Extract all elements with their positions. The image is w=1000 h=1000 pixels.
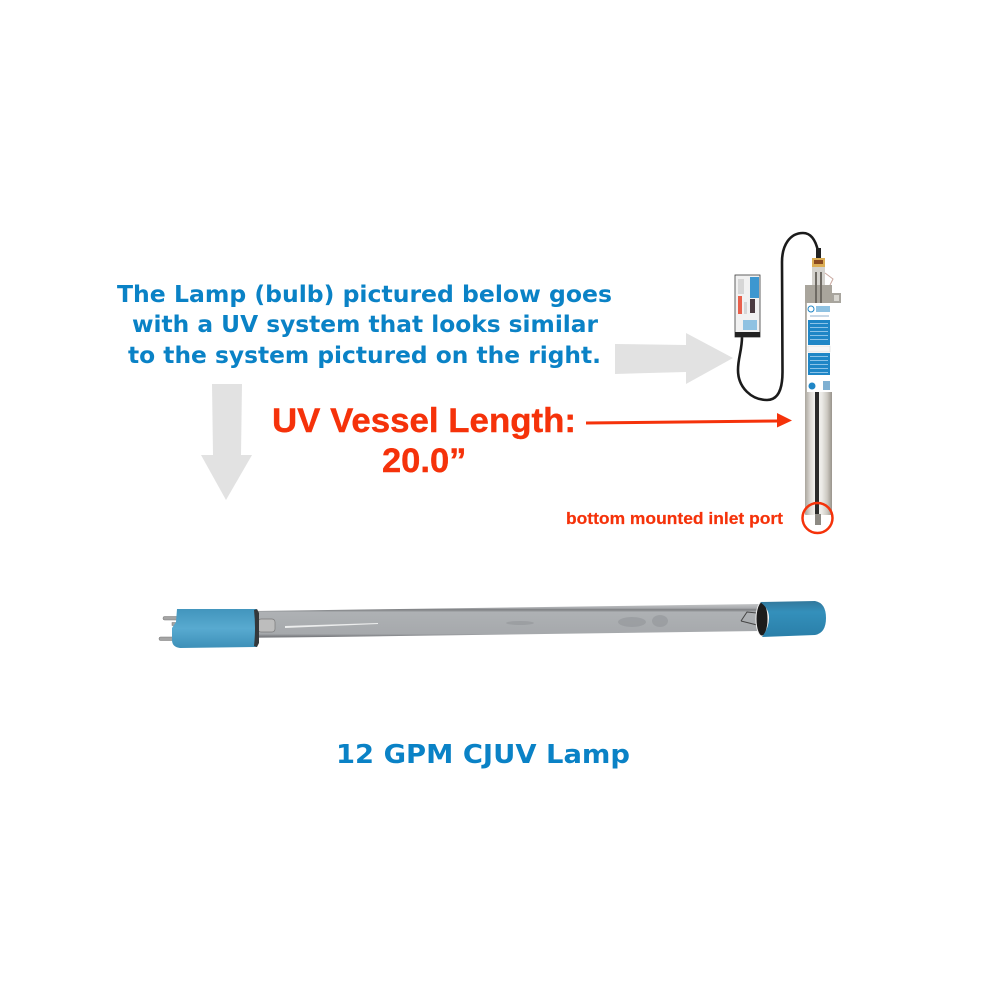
cable bbox=[738, 233, 818, 400]
callout: bottom mounted inlet port: bottom mounted inlet port bbox=[566, 510, 784, 528]
vessel body bbox=[805, 285, 832, 515]
heading: UV vessel length bbox=[272, 402, 576, 480]
lamp tube bbox=[255, 604, 760, 638]
intro text: to the system pictured on the right. bbox=[128, 343, 601, 369]
lamp title: 12 GPM CJUV Lamp bbox=[336, 740, 630, 770]
lamp pins bbox=[159, 616, 186, 640]
inlet port bbox=[815, 514, 821, 525]
heading: UV vessel length: 20.0” bbox=[382, 442, 466, 480]
intro text: The Lamp (bulb) pictured below goes bbox=[117, 282, 612, 308]
arrow: gray pointing right bbox=[615, 333, 733, 384]
right cap bbox=[756, 602, 768, 636]
right filament bbox=[741, 612, 757, 625]
tube highlight bbox=[285, 623, 378, 628]
vessel centre strip bbox=[815, 392, 819, 516]
left filament bbox=[258, 619, 275, 632]
arrow: red pointing to vessel bbox=[586, 413, 792, 428]
intro text: with a UV system that looks similar bbox=[132, 312, 599, 338]
arrow: gray pointing down bbox=[201, 384, 252, 500]
UV system bbox=[735, 233, 841, 525]
UV lamp bbox=[159, 601, 826, 648]
left cap bbox=[172, 609, 257, 648]
tube mottling bbox=[506, 615, 668, 627]
heading: UV vessel length: UV Vessel Length: bbox=[272, 402, 576, 440]
icon: controller box bbox=[735, 275, 760, 337]
intro text bbox=[117, 282, 612, 369]
vessel label bbox=[807, 303, 832, 392]
callout: inlet circle bbox=[802, 503, 832, 533]
vessel fitting bbox=[812, 248, 841, 303]
